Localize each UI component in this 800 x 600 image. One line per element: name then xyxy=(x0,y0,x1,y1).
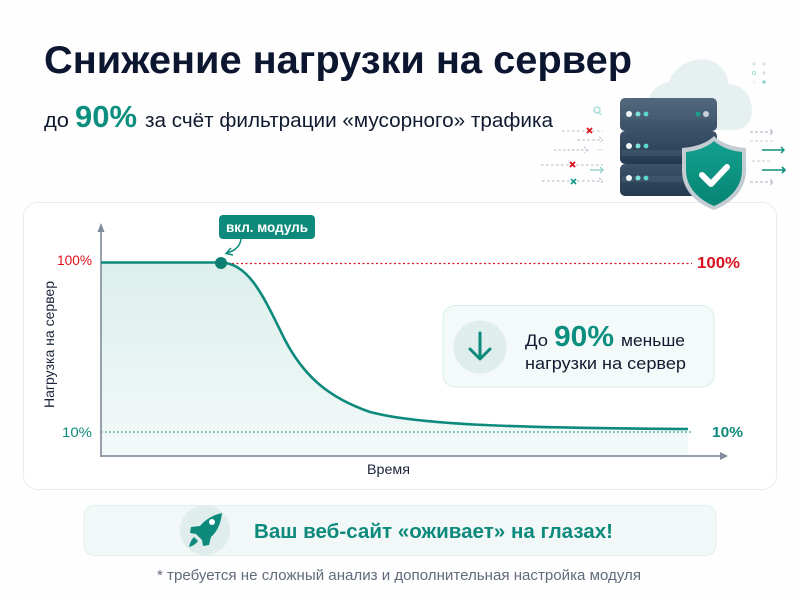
subtitle xyxy=(44,99,554,134)
subtitle: 90% xyxy=(75,99,137,134)
label: 100% right: 100% xyxy=(697,255,740,272)
icon: shield with check xyxy=(682,136,746,210)
label: 100% axis: 100% xyxy=(57,252,92,268)
icon: cloud xyxy=(642,60,752,130)
panel: chart xyxy=(24,202,776,490)
callout text: 90% xyxy=(554,321,614,353)
label: y axis: Нагрузка на сервер xyxy=(41,281,57,408)
incoming traffic arrows xyxy=(541,131,603,184)
decorative dots xyxy=(752,62,766,84)
label: 10% right: 10% xyxy=(712,424,743,441)
icon: magnifier xyxy=(594,107,601,115)
outgoing traffic arrows xyxy=(750,129,785,185)
arrow: module to marker xyxy=(226,239,241,255)
label: x axis: Время xyxy=(367,461,410,477)
axis: horizontal xyxy=(101,452,728,460)
reference line: 10% xyxy=(101,431,692,433)
icon: protected server illustration xyxy=(541,60,785,210)
footnote: * требуется не сложный анализ и дополнительная настройка модуля xyxy=(157,568,641,584)
chart area fill xyxy=(101,263,688,456)
label: 10% axis: 10% xyxy=(62,424,92,440)
icon: down arrow xyxy=(454,320,506,374)
callout text: До xyxy=(525,331,548,350)
badge: module on xyxy=(219,215,315,239)
curve xyxy=(101,262,688,429)
banner text: Ваш веб-сайт «оживает» на глазах! xyxy=(254,521,613,543)
subtitle: за счёт фильтрации «мусорного» трафика xyxy=(145,110,554,132)
icon: rocket xyxy=(180,505,230,555)
title: Снижение нагрузки на сервер xyxy=(44,39,632,82)
callout text xyxy=(525,321,686,373)
callout text: нагрузки на сервер xyxy=(525,354,686,373)
callout xyxy=(443,306,714,387)
marker: module on xyxy=(215,257,227,269)
callout text: меньше xyxy=(621,331,685,350)
axis: vertical xyxy=(98,223,104,457)
server racks xyxy=(620,98,717,196)
reference line: 100% xyxy=(232,262,692,264)
subtitle: до xyxy=(44,110,69,132)
badge: module on: вкл. модуль xyxy=(226,220,308,235)
blocked traffic marks xyxy=(570,128,592,184)
banner xyxy=(84,505,716,556)
